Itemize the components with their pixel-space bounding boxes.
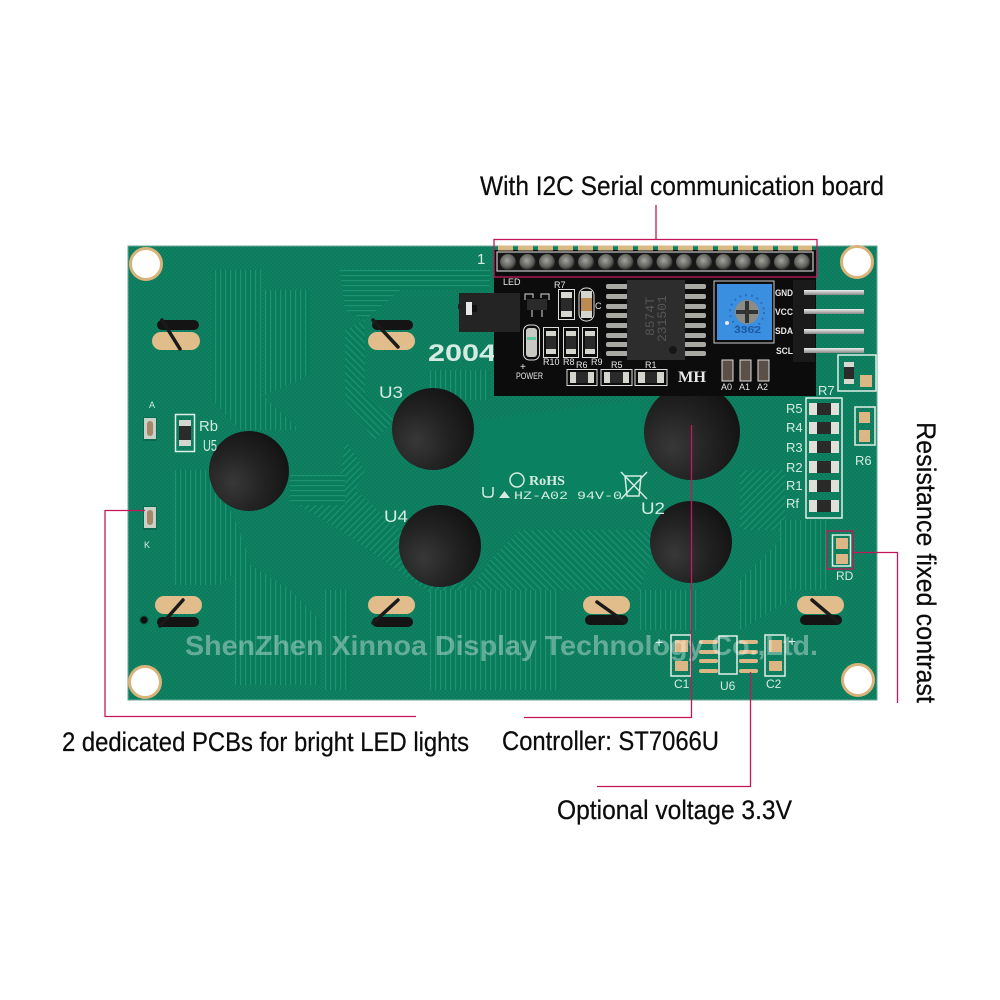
PCF8574 chip <box>627 280 685 360</box>
module labels: GND <box>775 288 793 298</box>
silkscreen markings: U2 <box>641 499 665 518</box>
Rb resistor <box>176 414 194 452</box>
A0 A1 A2 pads <box>722 360 769 381</box>
silkscreen markings: U5 <box>203 438 217 455</box>
silkscreen markings: A <box>149 400 155 410</box>
silkscreen markings: R1 <box>786 478 803 493</box>
module labels: R8 <box>563 357 575 367</box>
jumper <box>458 293 520 332</box>
resistor array R5 to Rf <box>806 398 842 518</box>
R6 pads <box>855 407 875 445</box>
silkscreen markings: HZ-A02 94V-0 <box>514 491 622 503</box>
transistor Q and pad near right edge <box>838 355 876 391</box>
module labels: R1 <box>645 360 657 370</box>
label: controller: Controller: ST7066U <box>502 726 719 756</box>
module labels: A1 <box>739 382 750 392</box>
callout: optional voltage <box>597 672 750 786</box>
module labels: VCC <box>775 307 793 317</box>
module labels: SDA <box>775 326 793 336</box>
copper trace bundles <box>175 270 830 690</box>
C1 U6 C2 footprint <box>671 635 785 676</box>
PCB board <box>128 246 877 700</box>
label: optional voltage: Optional voltage 3.3V <box>557 795 792 825</box>
silkscreen markings: C2 <box>766 677 782 691</box>
silkscreen markings: + <box>655 634 663 650</box>
silkscreen markings: 1 <box>477 251 485 268</box>
module labels: R10 <box>543 357 560 367</box>
callout: fixed contrast resistance <box>827 531 898 703</box>
transistor <box>525 294 549 317</box>
module labels: POWER <box>516 371 543 381</box>
module labels: A0 <box>721 382 732 392</box>
backlight LED pads A and K <box>143 417 157 530</box>
I2C module <box>458 248 864 396</box>
module labels: C <box>595 301 602 311</box>
16 solder pins <box>500 254 810 270</box>
MH logo: MH <box>678 369 707 386</box>
module labels <box>503 277 793 392</box>
RoHS and certification symbols <box>483 472 647 499</box>
R10 R8 R9 resistors <box>544 328 598 358</box>
heading: I2C label: With I2C Serial communication board <box>480 171 884 201</box>
PCF8574 chip: 8574T <box>643 297 658 336</box>
module labels: LED <box>503 277 521 287</box>
silkscreen markings: R4 <box>786 420 803 435</box>
silkscreen markings: C1 <box>674 677 690 691</box>
silkscreen markings: 2004 <box>428 340 497 367</box>
silkscreen markings: K <box>144 540 150 550</box>
module labels: + <box>520 362 526 373</box>
silkscreen markings: Rb <box>199 418 218 435</box>
silkscreen markings: U4 <box>384 507 408 526</box>
blue potentiometer: 3362 <box>734 325 762 336</box>
RD pads <box>832 535 850 566</box>
module labels: R5 <box>611 360 623 370</box>
LCD connection slots with wires <box>140 320 844 627</box>
module labels: SCL <box>776 346 793 356</box>
IC legs <box>606 284 706 356</box>
mounting holes <box>130 246 874 698</box>
label: fixed contrast resistance: Resistance fixed contrast <box>911 422 941 703</box>
pin row outline <box>497 252 813 271</box>
silkscreen markings <box>144 251 872 693</box>
silkscreen markings: Rf <box>786 496 799 511</box>
gold pin strip <box>494 248 816 396</box>
silkscreen markings: + <box>788 633 796 649</box>
label: LED PCBs: 2 dedicated PCBs for bright LED lights <box>62 727 469 757</box>
module labels: R9 <box>591 357 603 367</box>
C capacitor <box>579 288 594 321</box>
silkscreen markings: U3 <box>379 383 403 402</box>
blue potentiometer <box>714 281 774 343</box>
epoxy chip blobs <box>209 384 740 587</box>
callout: LED PCBs <box>105 510 416 716</box>
PCF8574 chip: 231501 <box>655 295 670 342</box>
callout: I2C board <box>494 205 817 277</box>
silkscreen markings: R5 <box>786 401 803 416</box>
silkscreen markings: R6 <box>855 453 872 468</box>
module labels: R7 <box>554 280 566 290</box>
silkscreen markings: U6 <box>720 679 736 693</box>
watermark: ShenZhen Xinnoa Display Technology Co.,Ltd. <box>185 630 818 661</box>
module labels: A2 <box>757 382 768 392</box>
right angle header <box>793 280 864 362</box>
silkscreen markings: R7 <box>818 383 835 398</box>
R6 R5 R4 resistors <box>567 370 667 386</box>
callout: controller <box>524 425 692 718</box>
power LED <box>524 325 540 360</box>
silkscreen markings: R3 <box>786 440 803 455</box>
R7 resistor <box>558 290 574 320</box>
silkscreen markings: RD <box>836 569 854 583</box>
silkscreen markings: R2 <box>786 460 803 475</box>
module labels: R6 <box>576 360 588 370</box>
silkscreen markings: RoHS <box>529 474 565 489</box>
